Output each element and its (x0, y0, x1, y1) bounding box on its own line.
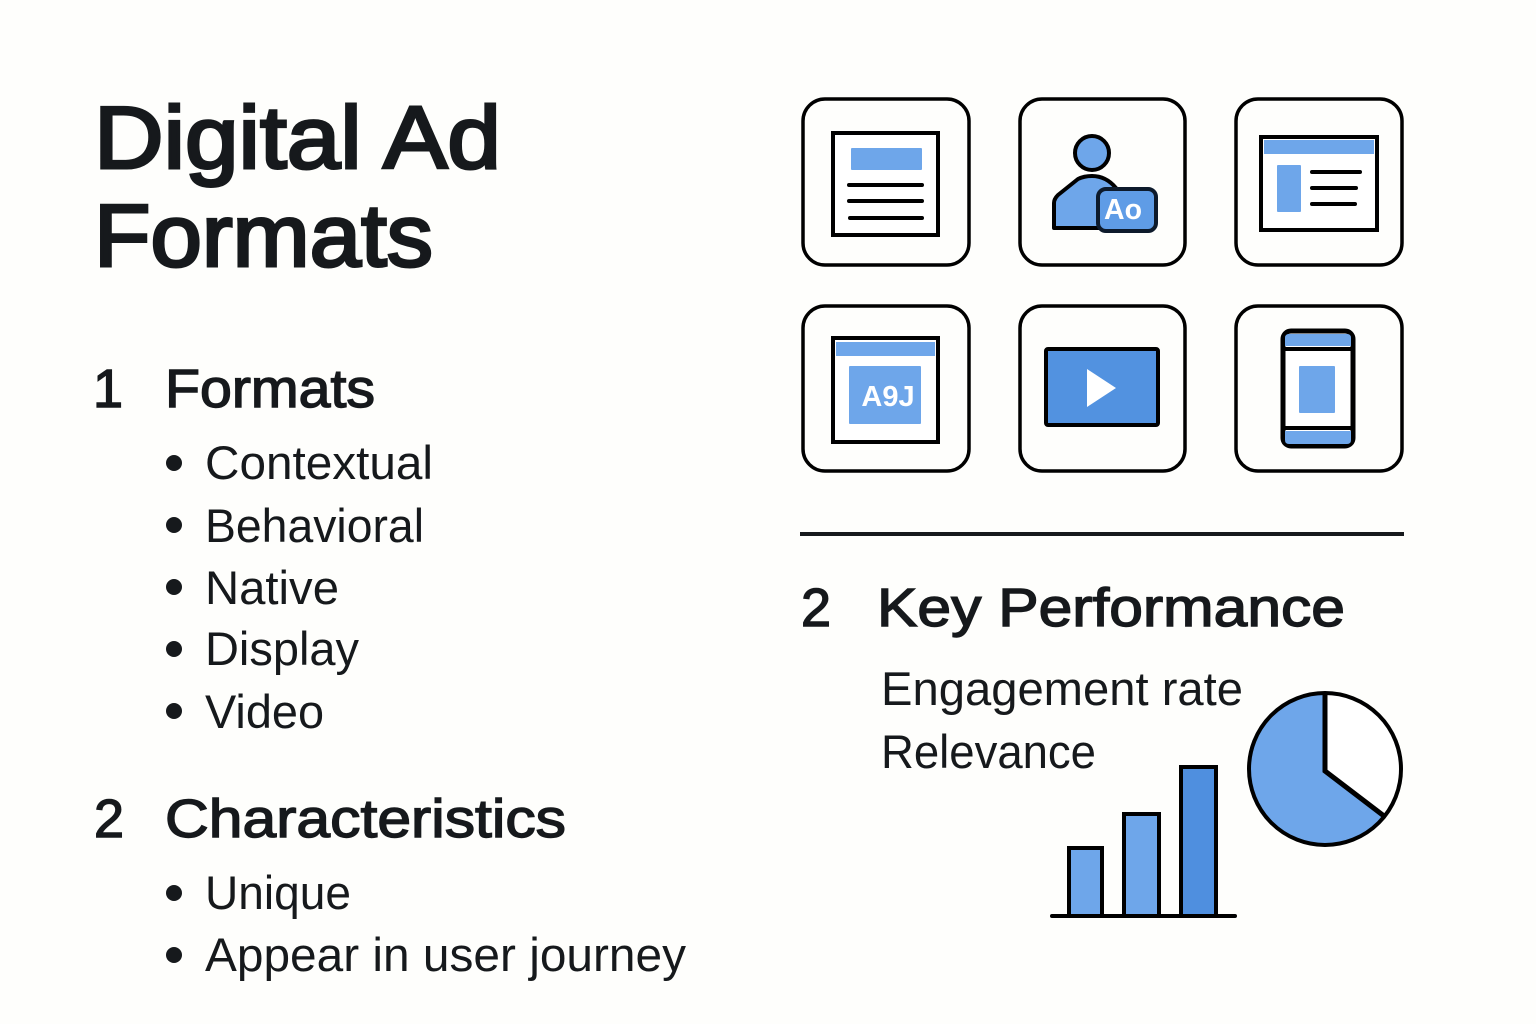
list: format types: Video (205, 685, 324, 738)
bar chart (1052, 767, 1235, 916)
icon: display ad window (803, 306, 969, 471)
icon: person with ad: Ao (1104, 194, 1142, 226)
heading: 1 Formats: Formats (165, 359, 375, 419)
heading: 1 Formats: 1 (93, 359, 123, 419)
pie chart (1249, 693, 1401, 845)
icon: web page with sidebar (1236, 99, 1402, 265)
panel: key performance section (801, 578, 1401, 916)
list: characteristics: Appear in user journey (205, 928, 686, 981)
text: performance metrics: Relevance (881, 725, 1096, 778)
icon: video player (1020, 306, 1185, 471)
heading: 2 Characteristics: 2 (94, 789, 124, 849)
title: Digital Ad (94, 88, 501, 187)
text: performance metrics: Engagement rate (881, 662, 1243, 715)
list: format types (166, 436, 433, 738)
panel: characteristics section (94, 789, 686, 981)
icon: display ad window: A9J (861, 381, 915, 413)
icon: article document (803, 99, 969, 265)
text: performance metrics (881, 662, 1243, 778)
icon: person with ad (1020, 99, 1185, 265)
panel: formats section (93, 359, 433, 738)
list: format types: Native (205, 561, 339, 614)
title: Formats (94, 186, 433, 285)
heading: 2 Key Performance: Key Performance (877, 578, 1345, 638)
list: format types: Display (205, 622, 359, 675)
heading: 2 Characteristics: Characteristics (165, 789, 566, 849)
heading: 2 Key Performance: 2 (801, 578, 831, 638)
list: format types: Behavioral (205, 499, 424, 552)
list: characteristics (166, 866, 686, 981)
list: format types: Contextual (205, 436, 433, 489)
icon: mobile phone (1236, 306, 1402, 471)
list: characteristics: Unique (205, 866, 351, 919)
title (94, 88, 501, 285)
